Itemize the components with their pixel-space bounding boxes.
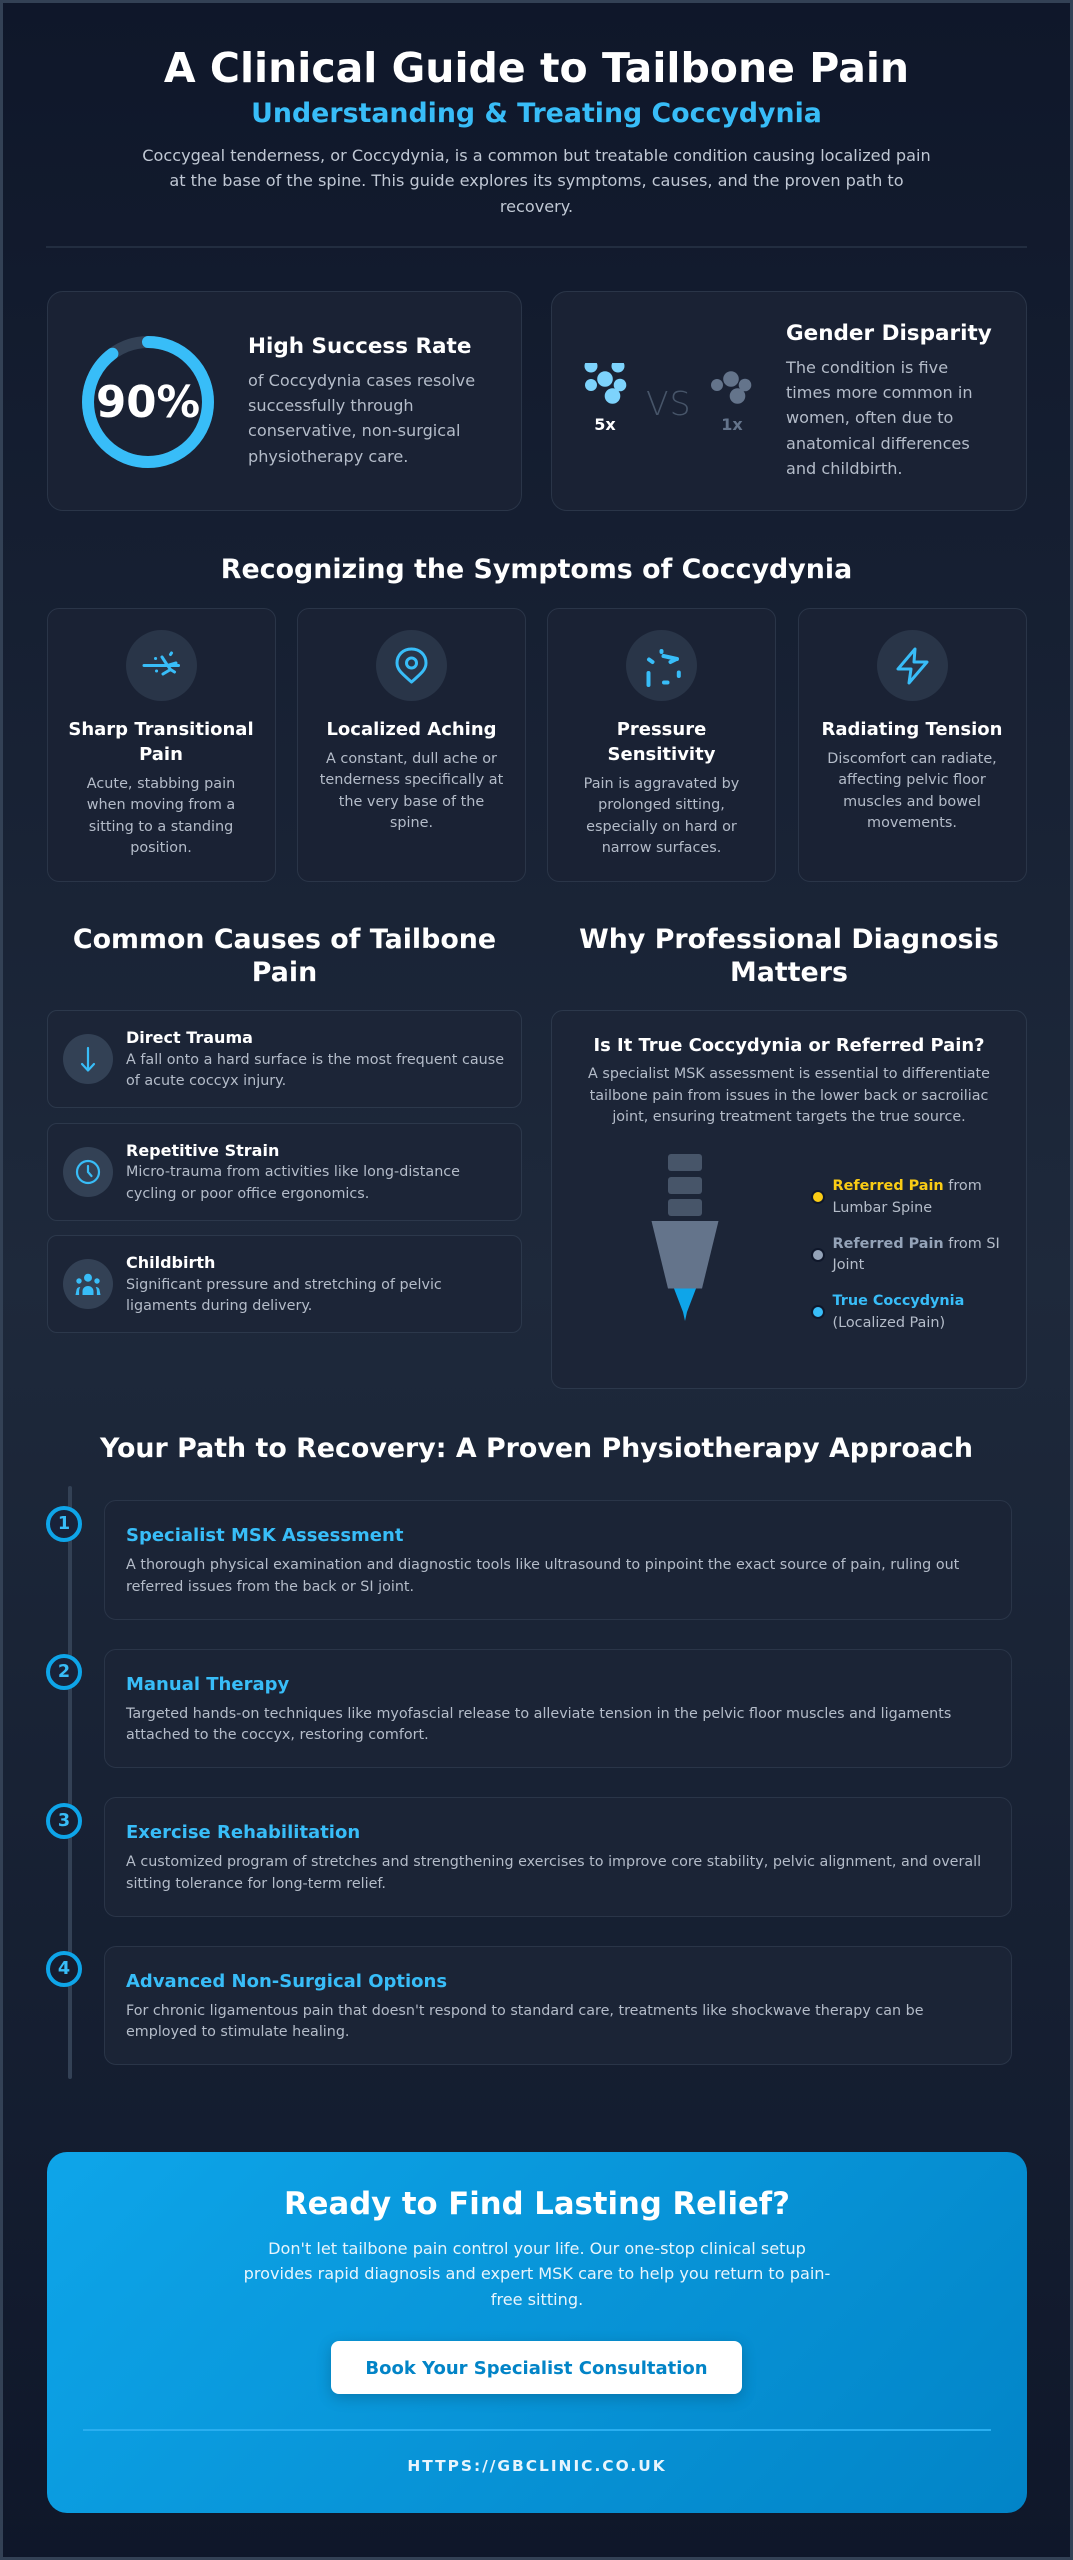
step number: 2 bbox=[58, 1662, 70, 1682]
icon: arrow down bbox=[63, 1034, 113, 1084]
step number: 4 bbox=[58, 1959, 70, 1979]
icon: lightning bolt bbox=[876, 630, 948, 700]
panel: pressure sensitivity bbox=[547, 608, 776, 882]
intro text: Coccygeal tenderness, or Coccydynia, is a common but treatable condition causing localized pain bbox=[142, 146, 931, 165]
card text: tenderness specifically at bbox=[320, 772, 503, 788]
diagnosis text: tailbone pain from issues in the lower back or sacroiliac bbox=[590, 1088, 988, 1104]
cause text: Significant pressure and stretching of pelvic bbox=[126, 1276, 442, 1292]
panel: sharp transitional pain bbox=[46, 608, 276, 882]
legend dot bbox=[811, 1305, 825, 1319]
step heading: Specialist MSK Assessment bbox=[126, 1525, 403, 1546]
cause text: Micro-trauma from activities like long-distance bbox=[126, 1164, 460, 1180]
legend: lumbar spine bbox=[811, 1178, 982, 1216]
step number bbox=[46, 1951, 82, 1987]
card heading: Sharp Transitional bbox=[68, 718, 254, 740]
step panel bbox=[104, 1648, 1012, 1768]
step panel bbox=[104, 1797, 1012, 1916]
legend text: True Coccydynia bbox=[832, 1293, 964, 1309]
card text: sitting to a standing bbox=[89, 819, 233, 835]
step text: A thorough physical examination and diagnostic tools like ultrasound to pinpoint the exact source of pain, ruling out bbox=[126, 1557, 959, 1573]
heading: diagnosis: Why Professional Diagnosis Matters bbox=[579, 924, 999, 988]
stat text bbox=[248, 371, 475, 466]
heading: symptoms: Recognizing the Symptoms of Coccydynia bbox=[221, 554, 852, 585]
label: VS: VS bbox=[646, 384, 692, 423]
website URL: HTTPS://GBCLINIC.CO.UK bbox=[407, 2457, 667, 2475]
icon: pressure bbox=[626, 630, 697, 700]
CTA heading: Ready to Find Lasting Relief? bbox=[284, 2187, 790, 2222]
diagnosis text: A specialist MSK assessment is essential to differentiate bbox=[588, 1066, 990, 1082]
card text: muscles and bowel bbox=[843, 794, 981, 810]
step text bbox=[126, 1706, 951, 1743]
legend: SI joint bbox=[811, 1236, 1000, 1273]
stat text: physiotherapy care. bbox=[248, 447, 408, 466]
cause text: A fall onto a hard surface is the most frequent cause bbox=[126, 1052, 504, 1068]
legend text: (Localized Pain) bbox=[832, 1315, 945, 1331]
legend text: Referred Pain from SI bbox=[832, 1236, 1000, 1252]
step text: A customized program of stretches and strengthening exercises to improve core stability, pelvic alignment, and overall bbox=[126, 1854, 981, 1870]
chart: 90 percent ring: 90% bbox=[96, 378, 200, 428]
panel: childbirth bbox=[47, 1235, 522, 1333]
cause text bbox=[126, 1052, 504, 1089]
chart: spine diagram bbox=[652, 1154, 718, 1321]
panel: call to action bbox=[47, 2152, 1027, 2513]
step panel bbox=[104, 1500, 1012, 1620]
card text: movements. bbox=[867, 815, 957, 831]
CTA text: provides rapid diagnosis and expert MSK care to help you return to pain- bbox=[244, 2264, 830, 2283]
step text: referred issues from the back or SI joint. bbox=[126, 1579, 414, 1595]
cause text: of acute coccyx injury. bbox=[126, 1073, 286, 1089]
heading: path to recovery: Your Path to Recovery: A Proven Physiotherapy Approach bbox=[100, 1433, 973, 1464]
timeline line bbox=[68, 1486, 72, 2079]
legend: true coccydynia bbox=[811, 1293, 964, 1331]
intro text: at the base of the spine. This guide explores its symptoms, causes, and the proven path to bbox=[169, 171, 904, 190]
cause heading: Childbirth bbox=[126, 1253, 215, 1272]
panel: localized aching bbox=[297, 608, 526, 882]
card text bbox=[86, 776, 235, 856]
card text: A constant, dull ache or bbox=[326, 750, 497, 766]
cause heading: Direct Trauma bbox=[126, 1028, 253, 1047]
card heading: Localized Aching bbox=[326, 718, 497, 740]
stat heading: Gender Disparity bbox=[786, 321, 992, 346]
stat text: times more common in bbox=[786, 383, 973, 402]
CTA text: free sitting. bbox=[491, 2290, 583, 2309]
cause text bbox=[126, 1164, 460, 1202]
card text: especially on hard or bbox=[586, 819, 737, 835]
card text bbox=[584, 776, 739, 856]
step 1 bbox=[46, 1500, 1012, 1620]
card heading bbox=[608, 718, 716, 764]
cause text: cycling or poor office ergonomics. bbox=[126, 1186, 369, 1202]
legend text bbox=[832, 1178, 982, 1216]
legend text: Lumbar Spine bbox=[832, 1200, 932, 1216]
step text bbox=[126, 1557, 959, 1595]
card heading: Radiating Tension bbox=[822, 718, 1002, 740]
step number bbox=[46, 1654, 82, 1690]
panel: direct trauma bbox=[47, 1010, 522, 1108]
icon: clock bbox=[63, 1146, 113, 1196]
CTA button bbox=[331, 2341, 742, 2394]
panel: repetitive strain bbox=[47, 1122, 522, 1220]
stat text: women, often due to bbox=[786, 408, 953, 427]
stat text: and childbirth. bbox=[786, 459, 903, 478]
card text bbox=[827, 750, 997, 831]
cause heading: Repetitive Strain bbox=[126, 1140, 279, 1160]
step heading: Exercise Rehabilitation bbox=[126, 1822, 360, 1843]
step 2 bbox=[46, 1649, 1012, 1768]
step heading: Advanced Non-Surgical Options bbox=[126, 1970, 447, 1992]
diagnosis text bbox=[588, 1066, 990, 1125]
card text: spine. bbox=[390, 815, 433, 831]
step 3 bbox=[46, 1797, 1012, 1917]
stat text: anatomical differences bbox=[786, 434, 970, 453]
title: A Clinical Guide to Tailbone Pain bbox=[164, 44, 909, 92]
panel: radiating tension bbox=[798, 608, 1026, 882]
step text bbox=[126, 1854, 981, 1892]
step number: 1 bbox=[58, 1514, 70, 1534]
step text: For chronic ligamentous pain that doesn't respond to standard care, treatments like shockwave therapy can be bbox=[126, 2002, 924, 2018]
step number: 3 bbox=[58, 1810, 70, 1830]
card text: narrow surfaces. bbox=[602, 840, 721, 856]
CTA text bbox=[244, 2239, 830, 2309]
icon: group bbox=[63, 1259, 113, 1309]
step number bbox=[46, 1506, 82, 1542]
cause text: ligaments during delivery. bbox=[126, 1298, 312, 1314]
stat heading: High Success Rate bbox=[248, 334, 471, 359]
stat text: conservative, non-surgical bbox=[248, 421, 460, 440]
stat text: of Coccydynia cases resolve bbox=[248, 371, 475, 390]
card heading bbox=[68, 718, 254, 764]
legend text bbox=[832, 1293, 964, 1331]
step number bbox=[46, 1802, 82, 1838]
subtitle: Understanding & Treating Coccydynia bbox=[251, 98, 822, 128]
icon: location pin bbox=[376, 630, 447, 700]
CTA button: Book Your Specialist Consultation bbox=[365, 2358, 708, 2379]
stat text: The condition is five bbox=[786, 358, 948, 377]
cause text bbox=[126, 1276, 442, 1314]
card text: when moving from a bbox=[87, 797, 235, 813]
panel: gender disparity bbox=[551, 291, 1027, 511]
stat text bbox=[786, 358, 973, 478]
panel: high success rate bbox=[47, 291, 522, 511]
step text bbox=[126, 2002, 924, 2040]
heading: causes: Common Causes of Tailbone Pain bbox=[73, 924, 496, 988]
card heading: Pain bbox=[139, 744, 183, 764]
card text: affecting pelvic floor bbox=[838, 772, 986, 788]
icon: men group bbox=[711, 371, 752, 404]
intro text bbox=[142, 146, 931, 216]
diagnosis text: joint, ensuring treatment targets the true source. bbox=[612, 1109, 966, 1125]
card text: Acute, stabbing pain bbox=[87, 776, 235, 792]
diagnosis heading: Is It True Coccydynia or Referred Pain? bbox=[594, 1035, 984, 1056]
step text: sitting tolerance for long-term relief. bbox=[126, 1876, 386, 1892]
card text: the very base of the bbox=[339, 794, 484, 810]
intro text: recovery. bbox=[500, 197, 573, 216]
card heading: Pressure bbox=[617, 718, 706, 740]
icon: sharp pain bbox=[126, 630, 196, 700]
header bbox=[46, 44, 1027, 248]
panel: diagnosis bbox=[551, 1010, 1027, 1389]
legend dot bbox=[811, 1248, 825, 1262]
legend text: Joint bbox=[832, 1257, 864, 1273]
legend text: Referred Pain from bbox=[832, 1178, 982, 1194]
legend text bbox=[832, 1236, 1000, 1273]
step panel bbox=[104, 1946, 1012, 2065]
label: 5x: 5x bbox=[594, 415, 616, 434]
step text: employed to stimulate healing. bbox=[126, 2024, 349, 2040]
chart: 90 percent ring bbox=[82, 336, 214, 468]
legend dot bbox=[811, 1190, 825, 1204]
card text: position. bbox=[130, 840, 192, 856]
card text: prolonged sitting, bbox=[598, 797, 725, 813]
step heading: Manual Therapy bbox=[126, 1674, 289, 1694]
card text: Pain is aggravated by bbox=[584, 776, 739, 792]
icon: women group bbox=[584, 363, 626, 404]
step 4 bbox=[46, 1946, 1012, 2065]
label: 1x: 1x bbox=[721, 415, 743, 434]
step text: attached to the coccyx, restoring comfort. bbox=[126, 1727, 429, 1743]
card heading: Sensitivity bbox=[608, 744, 715, 764]
step text: Targeted hands-on techniques like myofascial release to alleviate tension in the pelvic floor muscles and ligaments bbox=[126, 1706, 951, 1722]
card text bbox=[320, 750, 503, 831]
CTA text: Don't let tailbone pain control your life. Our one-stop clinical setup bbox=[268, 2239, 806, 2258]
stat text: successfully through bbox=[248, 396, 414, 415]
card text: Discomfort can radiate, bbox=[827, 750, 997, 766]
